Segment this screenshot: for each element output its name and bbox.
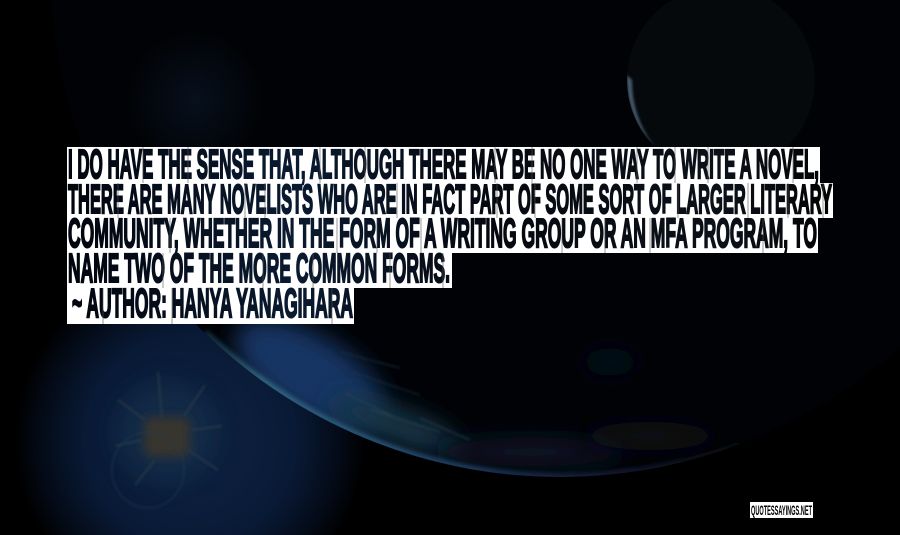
white line backgrounds xyxy=(67,147,833,324)
watermark xyxy=(750,502,813,518)
quote block: ~ AUTHOR: HANYA YANAGIHARA xyxy=(72,280,353,326)
background: sun flare xyxy=(112,372,222,508)
background: earth horizon xyxy=(134,39,740,477)
quote block xyxy=(67,141,833,326)
background: moon crescent xyxy=(627,74,656,146)
infographic canvas: QUOTESSAYINGS.NET xyxy=(751,502,812,518)
